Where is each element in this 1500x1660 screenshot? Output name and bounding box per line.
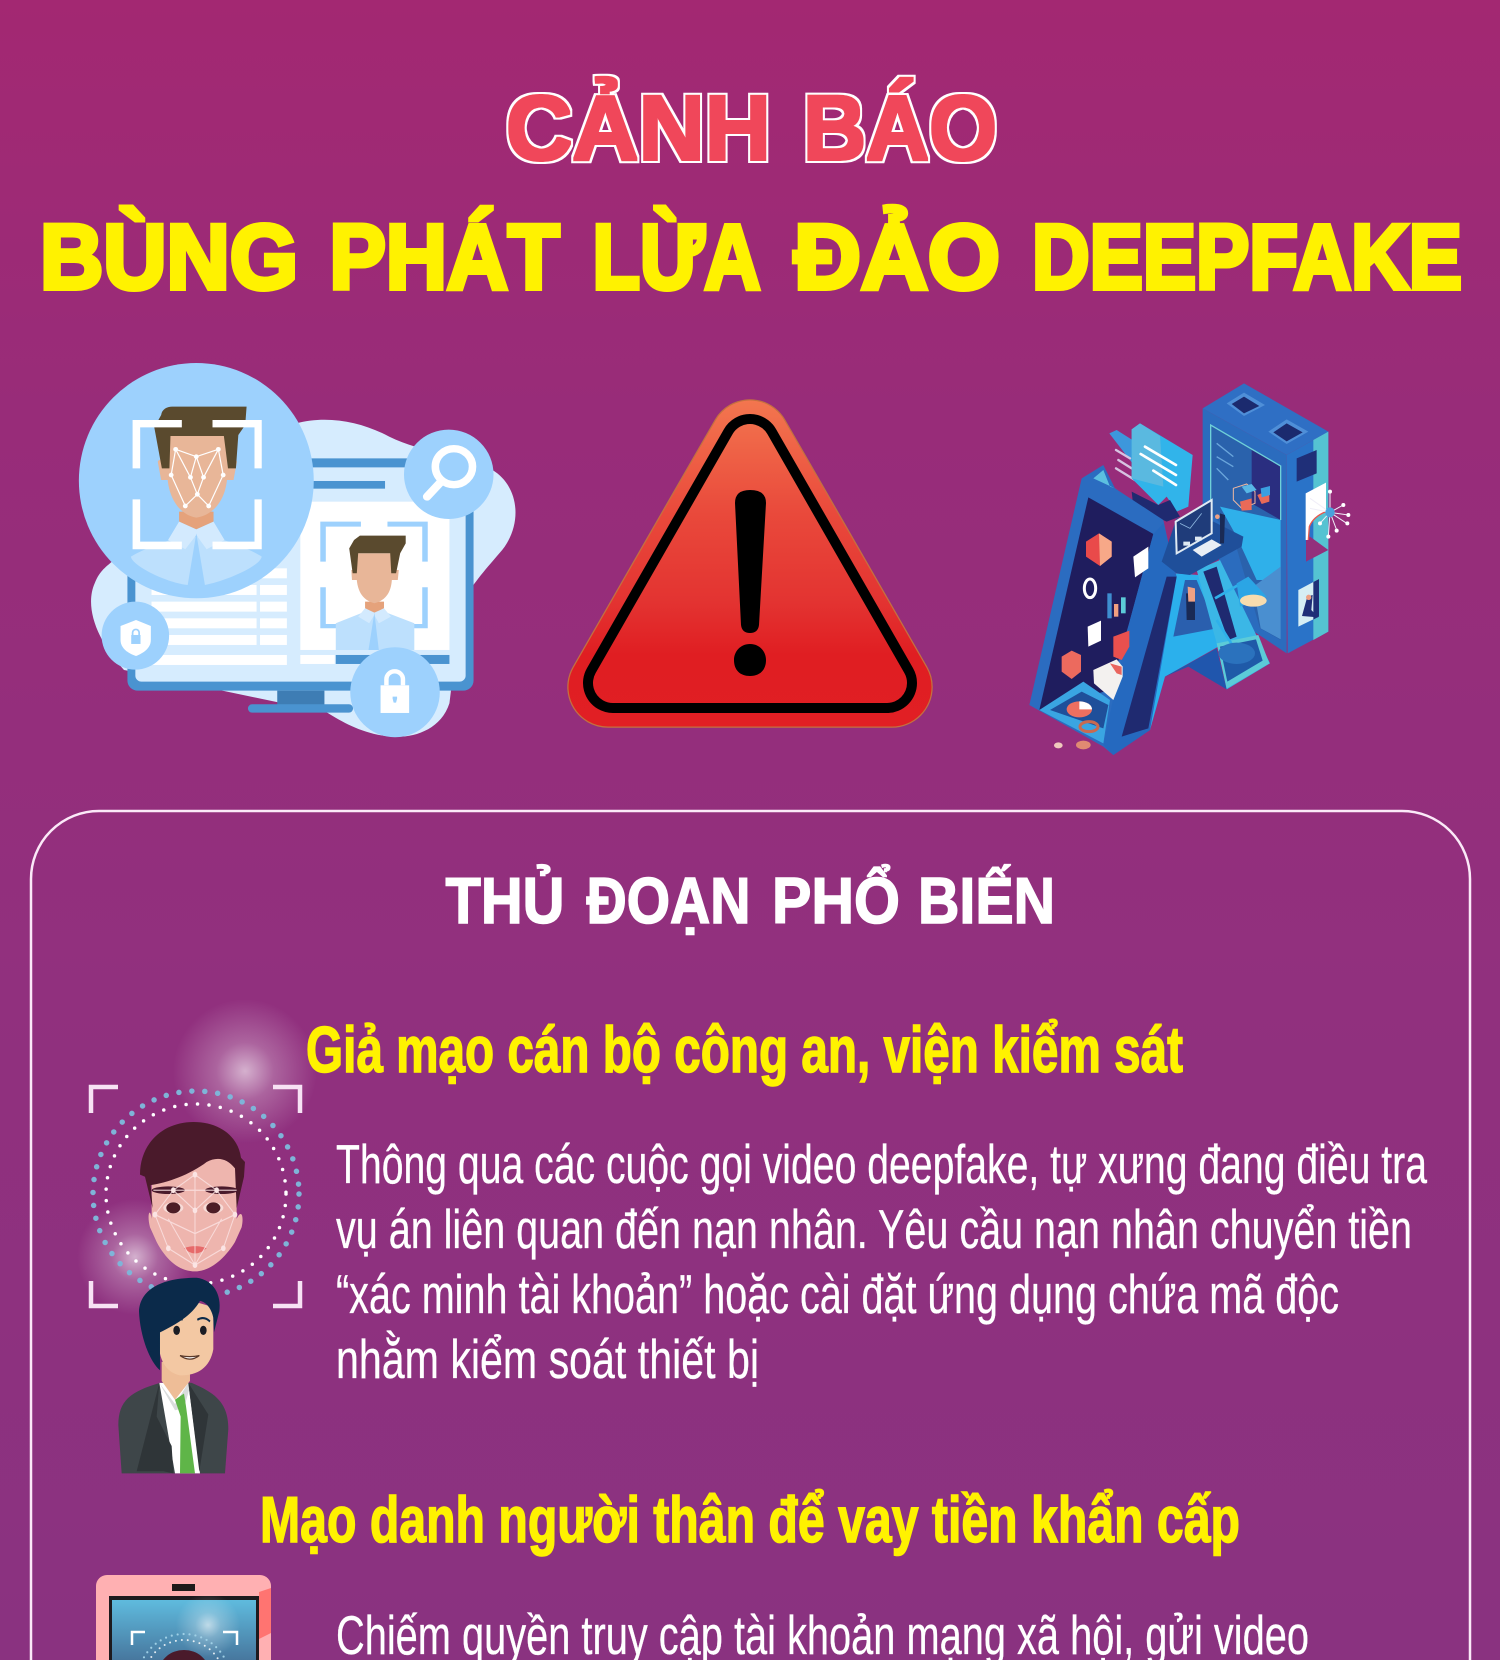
scanned face bbox=[140, 1122, 245, 1271]
desk lamp bbox=[1215, 577, 1267, 664]
profile card with small person bbox=[300, 502, 449, 650]
title: main headline: ĐẢO bbox=[794, 206, 1000, 308]
icon: warning triangle bbox=[608, 440, 892, 687]
heading: common tricks: PHỔ bbox=[772, 864, 900, 937]
icon: padlock bbox=[350, 647, 440, 737]
monitor bbox=[127, 458, 474, 713]
illustration: face recognition on computer bbox=[79, 363, 516, 737]
heading: common tricks: ĐOẠN bbox=[586, 864, 750, 937]
desk with laptop bbox=[1162, 500, 1243, 575]
blob background bbox=[91, 420, 516, 737]
title: main headline: PHÁT bbox=[330, 206, 560, 308]
scan brackets bbox=[133, 420, 262, 549]
scanned person bbox=[131, 407, 262, 585]
heading: common tricks bbox=[446, 864, 1055, 937]
illustration: tablet with face scan bbox=[96, 1575, 271, 1660]
title: main headline bbox=[40, 206, 1462, 308]
small gears bbox=[1054, 741, 1091, 749]
face mesh bbox=[171, 449, 223, 506]
title: warning bbox=[506, 76, 997, 180]
title: warning: CẢNH bbox=[506, 76, 771, 180]
text block: police impersonation description: nhằm kiểm soát thiết bị bbox=[336, 1328, 759, 1390]
dotted rings bbox=[93, 1091, 299, 1297]
title: warning: BÁO bbox=[803, 78, 997, 180]
heading: common tricks: BIẾN bbox=[918, 864, 1055, 937]
chat panels bbox=[1109, 423, 1193, 522]
icon: shield bbox=[102, 602, 169, 670]
large face scan circle bbox=[79, 363, 314, 598]
subheading: impersonating police and prosecutors: Giả mạo cán bộ công an, viện kiểm sát bbox=[306, 1013, 1183, 1086]
panel: common tricks bbox=[31, 811, 1470, 1660]
form rows bbox=[152, 568, 449, 665]
heading: common tricks: THỦ bbox=[446, 864, 564, 937]
glow bbox=[173, 999, 317, 1143]
icon: magnifier bbox=[404, 430, 494, 519]
illustration: isometric AI letters bbox=[1029, 383, 1350, 755]
letter A bbox=[1029, 465, 1270, 755]
exclamation mark bbox=[734, 490, 766, 676]
small worker bbox=[1186, 587, 1195, 620]
letter I bbox=[1203, 383, 1328, 653]
title: main headline: LỪA bbox=[592, 206, 760, 308]
icons inside A bbox=[1086, 533, 1112, 566]
text block: police impersonation description bbox=[336, 1133, 1427, 1390]
illustration: face scan of officer bbox=[77, 999, 317, 1473]
businessman bbox=[118, 1278, 228, 1473]
title: main headline: BÙNG bbox=[40, 206, 298, 308]
scan corner brackets bbox=[91, 1087, 300, 1306]
circuit node bbox=[1310, 490, 1350, 539]
